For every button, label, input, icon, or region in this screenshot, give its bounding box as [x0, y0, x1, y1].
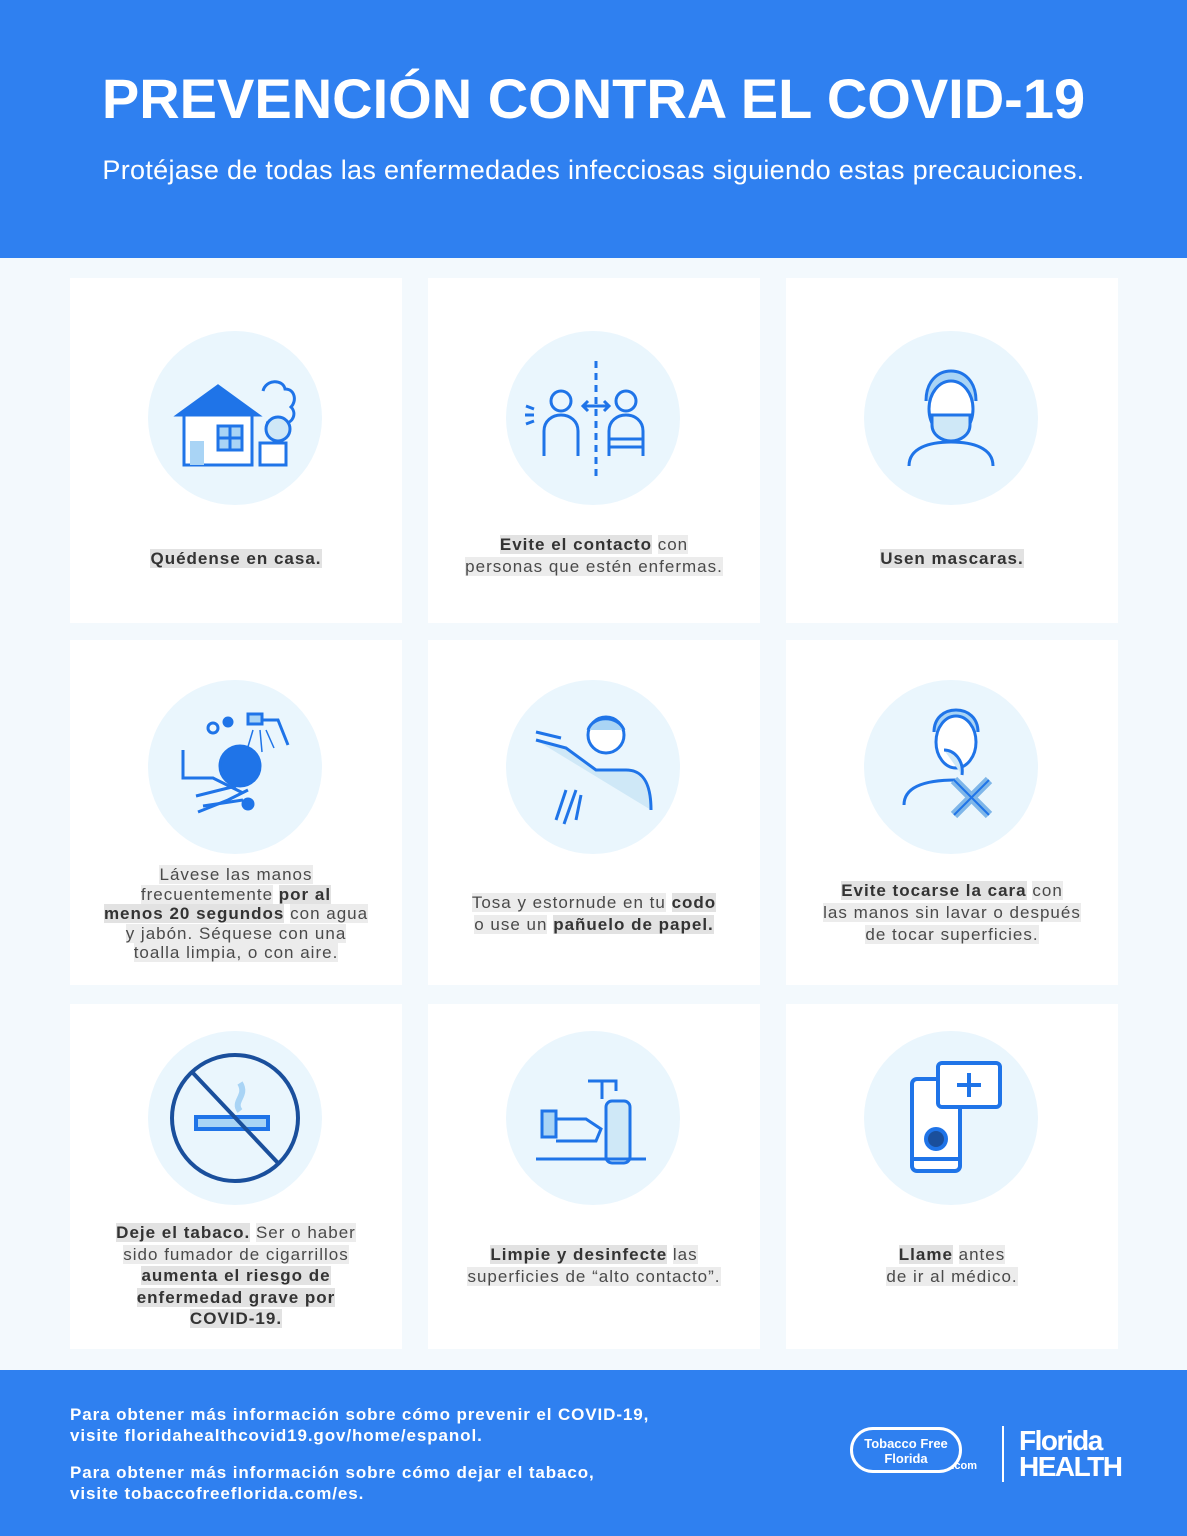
logo: Florida Health	[1019, 1425, 1122, 1482]
text: Limpie y desinfecte las	[490, 1245, 698, 1264]
text	[472, 893, 716, 934]
text	[116, 1223, 356, 1328]
footer text: covid info: visite floridahealthcovid19.gov/home/espanol.	[70, 1426, 483, 1445]
text: de ir al médico.	[886, 1267, 1018, 1286]
icon: mask	[864, 331, 1038, 505]
panel: avoid contact	[428, 278, 760, 623]
footer text: covid info	[70, 1405, 649, 1445]
text: sido fumador de cigarrillos	[123, 1244, 349, 1264]
panel: quit tobacco	[70, 1004, 402, 1349]
text	[823, 881, 1081, 944]
icon: distancing	[506, 331, 680, 505]
text: menos 20 segundos con agua	[104, 904, 368, 923]
logo: Florida Health: HEALTH	[1019, 1451, 1121, 1482]
panel: call doctor	[786, 1004, 1118, 1349]
text: Tosa y estornude en tu codo	[472, 893, 716, 912]
header	[0, 0, 1187, 258]
text	[467, 1245, 721, 1286]
icon: house	[148, 331, 322, 505]
text: Quédense en casa.	[150, 549, 322, 568]
text: Evite el contacto con	[500, 535, 688, 554]
icon: no smoking	[148, 1031, 322, 1205]
divider line	[1002, 1426, 1004, 1482]
text: aumenta el riesgo de	[141, 1266, 331, 1285]
text	[465, 535, 723, 576]
title: PREVENCIÓN CONTRA EL COVID-19	[102, 67, 1085, 130]
icon: cough into elbow	[506, 680, 680, 854]
footer	[0, 1370, 1187, 1536]
text: Llame antes	[899, 1245, 1005, 1264]
panel: stay home	[70, 278, 402, 623]
icon: sanitizer	[506, 1031, 680, 1205]
text	[886, 1245, 1018, 1286]
footer: .com	[951, 1460, 977, 1472]
logo: Florida Health: Florida	[1019, 1425, 1102, 1456]
text: o use un pañuelo de papel.	[474, 915, 714, 934]
panel: clean and disinfect	[428, 1004, 760, 1349]
text: personas que estén enfermas.	[465, 557, 723, 576]
logo: Tobacco Free Florida: Tobacco Free	[864, 1436, 948, 1451]
panel: cough	[428, 640, 760, 985]
subtitle: Protéjase de todas las enfermedades infecciosas siguiendo estas precauciones.	[102, 155, 1085, 185]
footer text: covid info: Para obtener más información sobre cómo prevenir el COVID-19,	[70, 1405, 649, 1424]
text: y jabón. Séquese con una	[126, 924, 346, 942]
text: Lávese las manos	[159, 865, 313, 884]
panel: wash hands	[70, 640, 402, 985]
logo: Tobacco Free Florida	[850, 1427, 962, 1473]
text: superficies de “alto contacto”.	[467, 1267, 721, 1286]
text: Usen mascaras.	[880, 549, 1024, 568]
panel: don't touch face	[786, 640, 1118, 985]
text	[104, 865, 368, 962]
logo: Tobacco Free Florida: Florida	[884, 1451, 928, 1466]
icon: hand washing	[148, 680, 322, 854]
panel: masks	[786, 278, 1118, 623]
text: enfermedad grave por	[137, 1288, 335, 1306]
footer text: tobacco info: Para obtener más información sobre cómo dejar el tabaco,	[70, 1463, 595, 1482]
text: de tocar superficies.	[865, 925, 1039, 944]
icon: face touch	[864, 680, 1038, 854]
footer text: tobacco info	[70, 1463, 595, 1503]
text: COVID-19.	[190, 1309, 282, 1328]
text: Deje el tabaco. Ser o haber	[116, 1223, 356, 1242]
text: Evite tocarse la cara con	[841, 881, 1063, 900]
icon: phone	[864, 1031, 1038, 1205]
footer text: tobacco info: visite tobaccofreeflorida.com/es.	[70, 1484, 364, 1503]
text: toalla limpia, o con aire.	[134, 943, 338, 962]
text: las manos sin lavar o después	[823, 903, 1081, 922]
text: frecuentemente por al	[141, 884, 331, 904]
